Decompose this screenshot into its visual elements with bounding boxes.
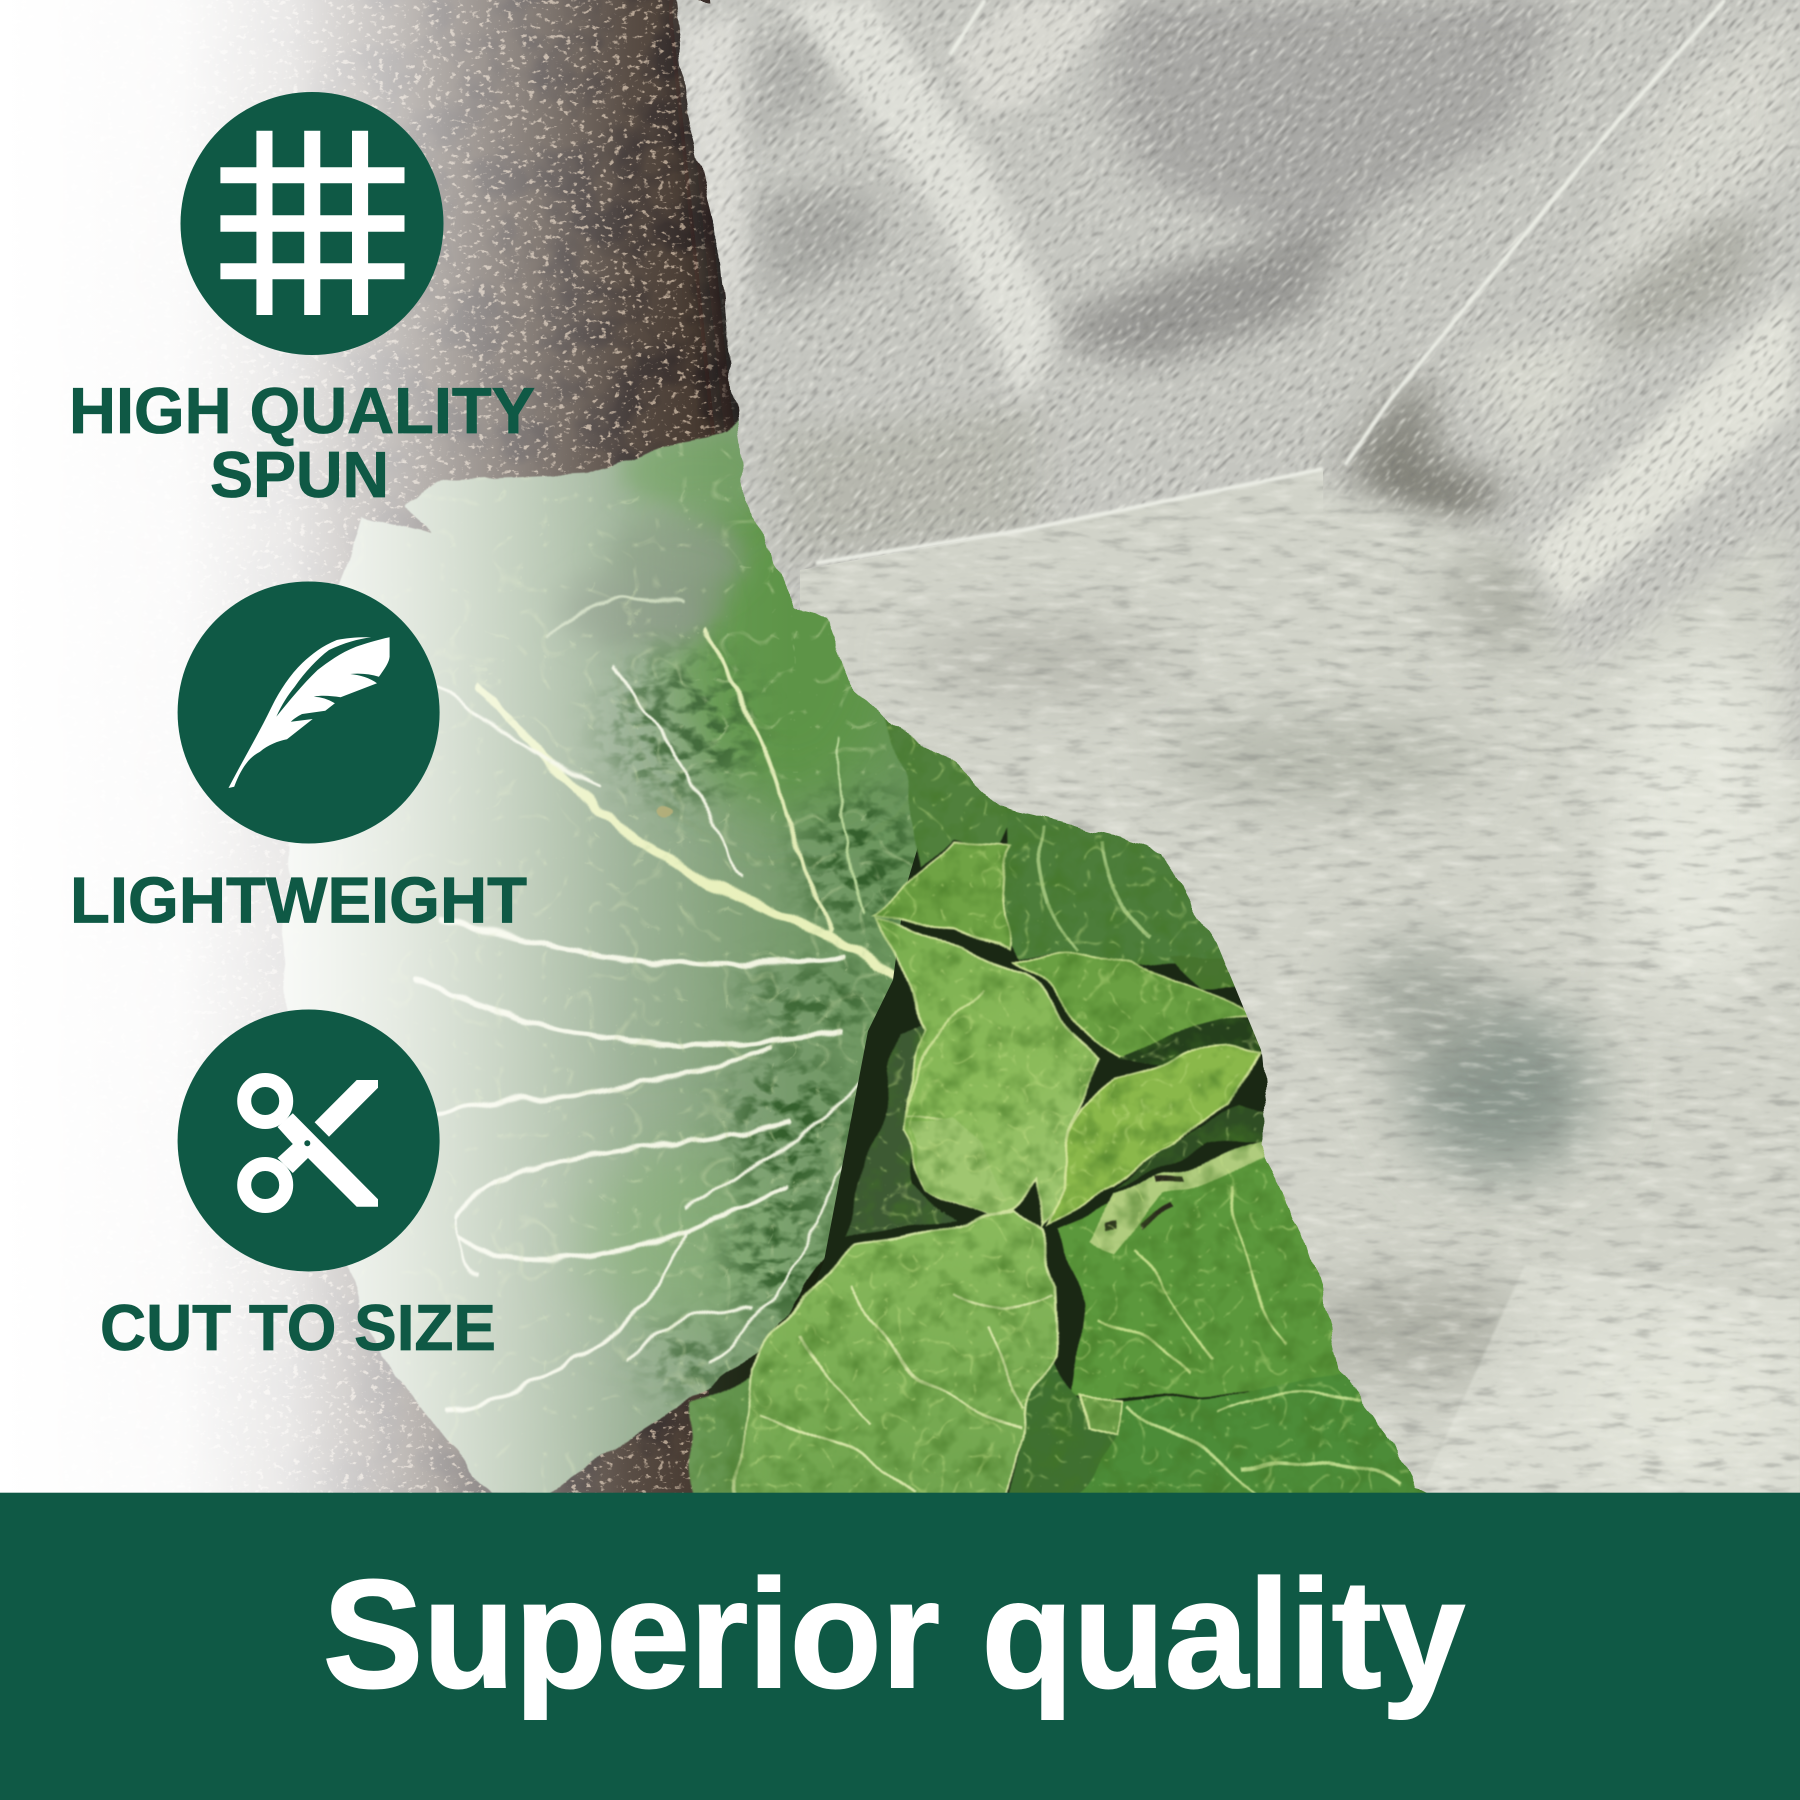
label: high quality spun: HIGH QUALITY [69,374,535,447]
ruffled upper leaf [873,843,1012,945]
small lower-left leaf [689,1368,753,1516]
icon: mesh grid [180,92,444,355]
bottom banner [0,1493,1800,1800]
fabric fold lines [816,0,1725,563]
label: high quality spun: SPUN [210,438,389,511]
soil background [0,0,1000,1493]
dark shadow band [1110,1103,1279,1200]
leaf behind top [876,690,1008,868]
leaf veins [415,598,894,1410]
label: cut to size: CUT TO SIZE [100,1291,496,1364]
label: high quality spun [69,374,535,511]
icon: scissors [178,1010,440,1272]
outer cabbage leaf [282,418,918,1493]
lower right leaf [1049,1139,1396,1399]
inner cabbage leaves [689,690,1467,1516]
label: lightweight: LIGHTWEIGHT [70,863,527,936]
hole-marked leaf rim [1090,1134,1279,1251]
cabbage heart shadow [735,770,1400,1493]
right curled leaf [1008,955,1256,1057]
central fold leaf [876,922,1095,1226]
bottom right leaf [1064,1363,1467,1516]
large front leaf [738,1205,1054,1516]
lower fleece panel [780,440,1800,1493]
pale ruffled leaf [1039,1055,1258,1226]
small dark leaf by the fold [845,1021,957,1236]
icon: feather [178,582,440,844]
mottled dark patches [610,660,915,1390]
feature: high quality spun [69,92,535,511]
feature: lightweight [70,582,527,936]
upper fleece panel [660,0,1800,760]
back leaf upper right [988,777,1263,970]
fleece fabric cover [660,0,1800,1493]
centre lower leaf [1008,1348,1118,1516]
feature: cut to size [100,1010,496,1364]
heading: superior quality: Superior quality [323,1548,1465,1720]
